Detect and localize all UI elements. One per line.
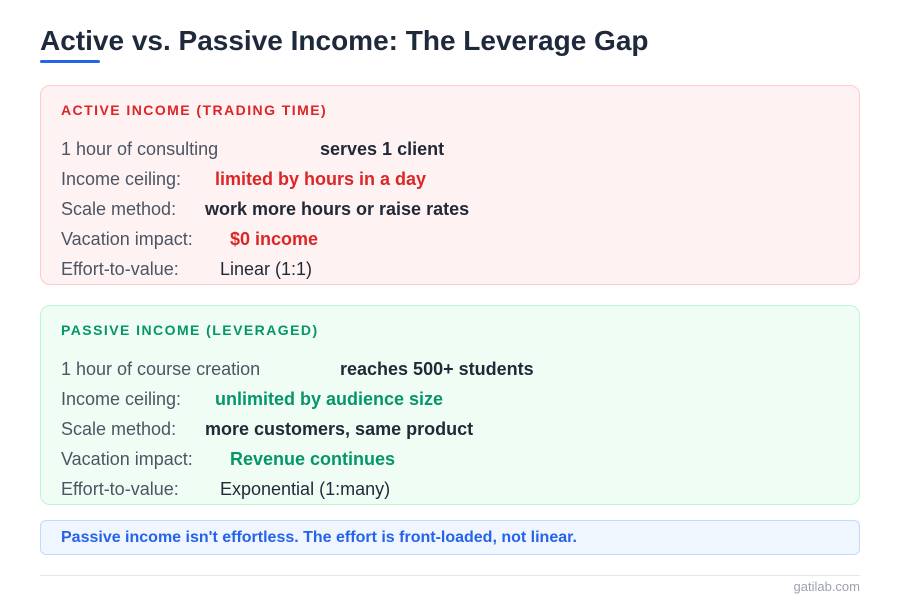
row: vacation: $0 income bbox=[230, 229, 318, 249]
row: scale: Scale method: bbox=[61, 419, 176, 439]
row: ceiling bbox=[61, 389, 443, 409]
row: vacation bbox=[61, 229, 318, 249]
row: course: 1 hour of course creation bbox=[61, 359, 260, 379]
row: course bbox=[61, 359, 534, 379]
row: ceiling: Income ceiling: bbox=[61, 389, 181, 409]
panel: passive income bbox=[40, 305, 860, 505]
callout bbox=[40, 520, 860, 555]
row: scale: work more hours or raise rates bbox=[205, 199, 469, 219]
row: ceiling bbox=[61, 169, 426, 189]
row: scale: Scale method: bbox=[61, 199, 176, 219]
row: course: reaches 500+ students bbox=[340, 359, 534, 379]
row: effort: Linear (1:1) bbox=[220, 259, 312, 279]
row: vacation bbox=[61, 449, 395, 469]
row: vacation: Vacation impact: bbox=[61, 449, 193, 469]
row: scale bbox=[61, 199, 469, 219]
row: effort: Exponential (1:many) bbox=[220, 479, 390, 499]
row: effort bbox=[61, 259, 312, 279]
row: effort bbox=[61, 479, 390, 499]
row: ceiling: Income ceiling: bbox=[61, 169, 181, 189]
row: effort: Effort-to-value: bbox=[61, 259, 179, 279]
row: vacation: Vacation impact: bbox=[61, 229, 193, 249]
row: scale bbox=[61, 419, 473, 439]
row: scale: more customers, same product bbox=[205, 419, 473, 439]
title: Active vs. Passive Income: The Leverage Gap bbox=[40, 25, 649, 56]
callout: Passive income isn't effortless. The effort is front-loaded, not linear. bbox=[61, 529, 577, 546]
row: consulting bbox=[61, 139, 444, 159]
row: vacation: Revenue continues bbox=[230, 449, 395, 469]
row: consulting: 1 hour of consulting bbox=[61, 139, 218, 159]
title underline bbox=[40, 60, 100, 63]
row: ceiling: unlimited by audience size bbox=[215, 389, 443, 409]
row: ceiling: limited by hours in a day bbox=[215, 169, 426, 189]
heading: active income: ACTIVE INCOME (TRADING TIME) bbox=[61, 102, 327, 118]
heading: passive income: PASSIVE INCOME (LEVERAGED) bbox=[61, 322, 319, 338]
row: consulting: serves 1 client bbox=[320, 139, 444, 159]
panel: active income bbox=[40, 85, 860, 285]
footer: source: gatilab.com bbox=[794, 579, 860, 594]
row: effort: Effort-to-value: bbox=[61, 479, 179, 499]
